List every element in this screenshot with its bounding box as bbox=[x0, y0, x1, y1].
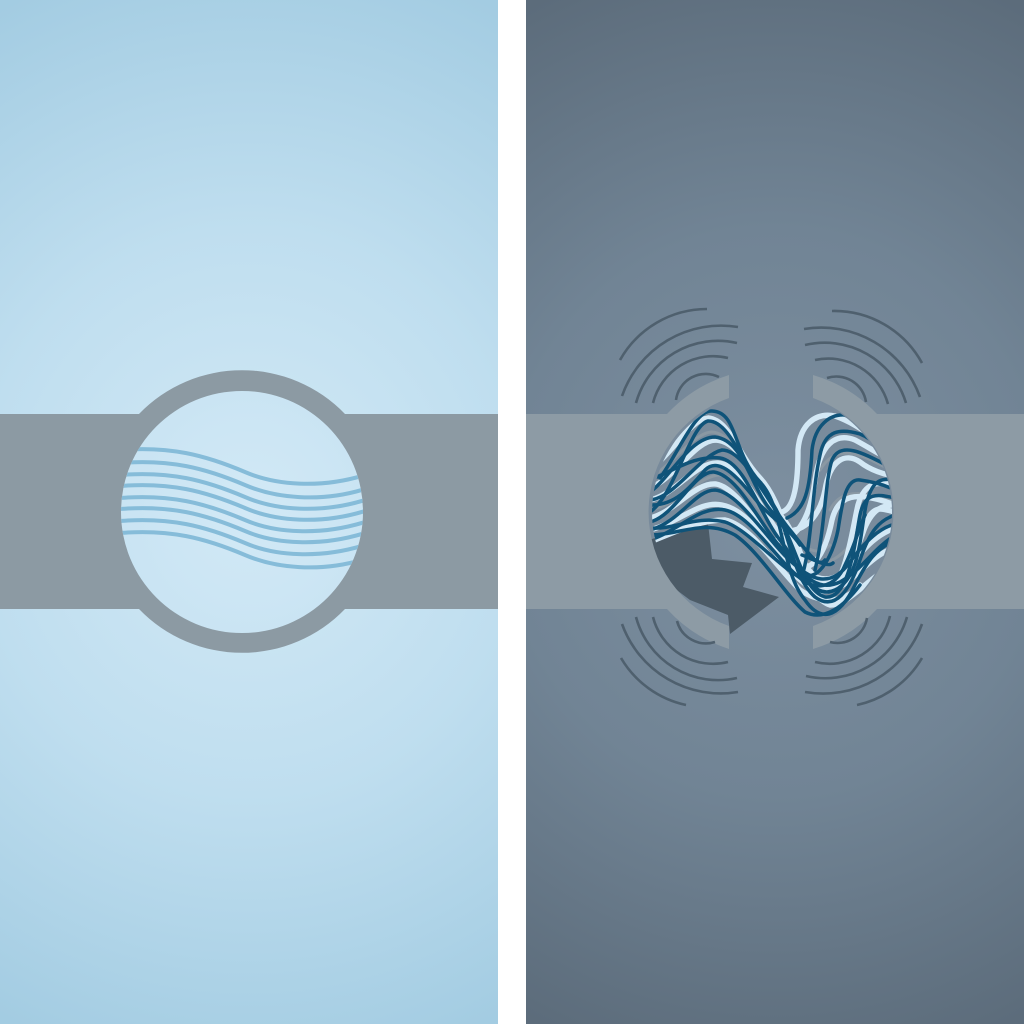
panel background: light blue bbox=[0, 0, 498, 1024]
pipe band and ring bbox=[0, 370, 498, 653]
vibration arcs: top right bbox=[804, 311, 922, 404]
pipe band and left ring arc bbox=[526, 375, 729, 649]
panel background: slate bbox=[526, 0, 1024, 1024]
vibration arcs: bottom right bbox=[805, 616, 922, 705]
vibration arcs: bottom left bbox=[621, 617, 738, 705]
panel: smooth flow bbox=[0, 0, 498, 1024]
tangled flow lines bbox=[650, 411, 895, 615]
vibration arcs: top left bbox=[620, 309, 738, 403]
laminar flow lines bbox=[120, 449, 365, 567]
panel: turbulent flow bbox=[526, 0, 1024, 1024]
dark blockage shape bbox=[645, 523, 779, 634]
pipe band and right ring arc bbox=[813, 375, 1024, 649]
light strands bbox=[650, 412, 895, 605]
dark strands bbox=[650, 411, 895, 615]
grey shadow strands bbox=[656, 430, 892, 565]
